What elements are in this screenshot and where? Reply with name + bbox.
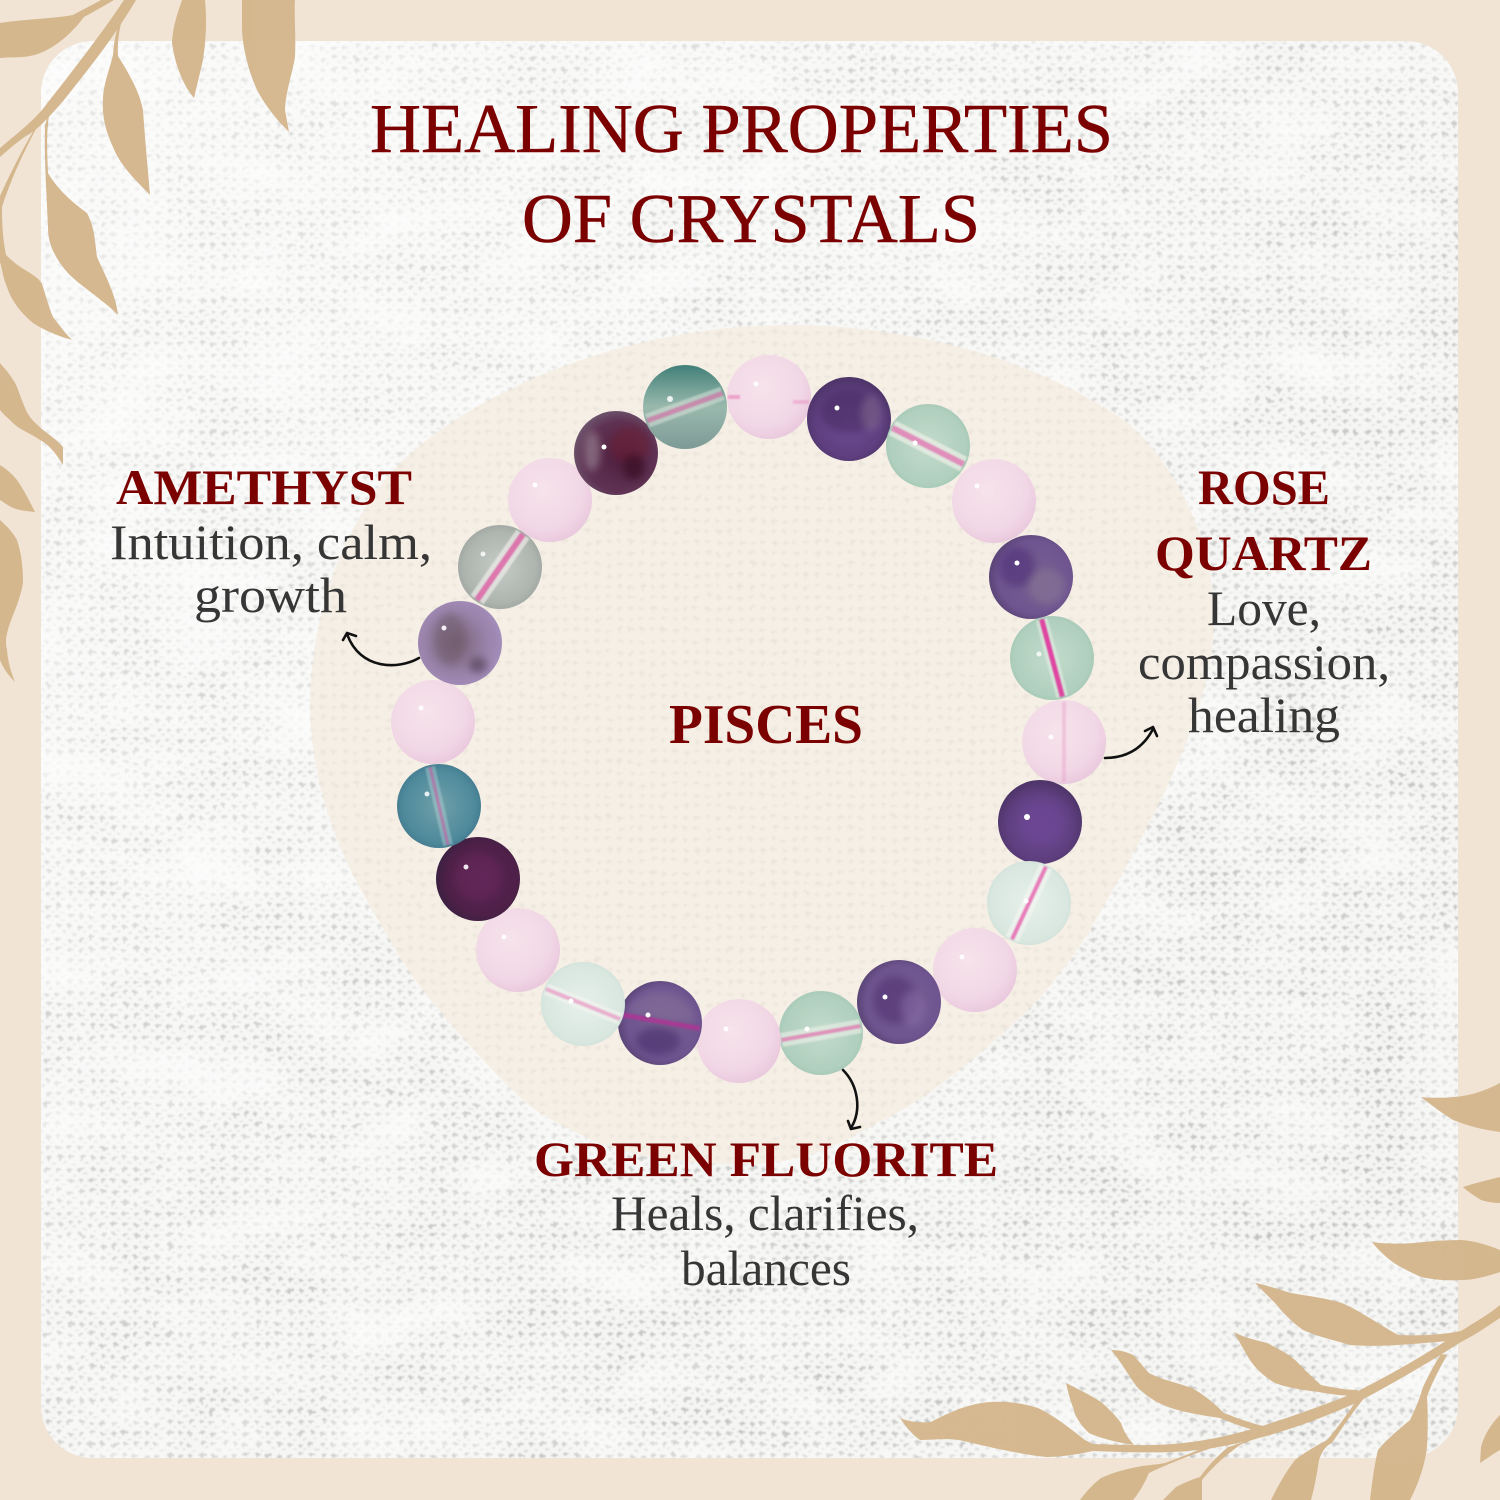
leaves: top-left branch xyxy=(0,0,295,340)
bead: green fluorite, labelled xyxy=(779,991,863,1075)
bead: rose quartz xyxy=(508,458,592,542)
bead: green fluorite xyxy=(1010,616,1094,700)
label: Amethyst: Intuition, calm, xyxy=(110,514,432,570)
cream blob behind bracelet xyxy=(300,315,1225,1175)
label: Rose Quartz: compassion, xyxy=(1138,634,1390,690)
label: Amethyst: growth xyxy=(194,567,347,623)
title xyxy=(370,91,1113,258)
bead: amethyst xyxy=(857,960,941,1044)
label: Green Fluorite: Heals, clarifies, xyxy=(611,1185,919,1241)
label: Rose Quartz: QUARTZ xyxy=(1155,525,1372,581)
bracelet of crystal beads xyxy=(391,355,1106,1083)
bead: rose quartz xyxy=(952,459,1036,543)
bead: grey fluorite xyxy=(458,525,542,609)
bead: pale fluorite xyxy=(987,861,1071,945)
arrow: to amethyst label xyxy=(343,633,419,665)
bead: rose quartz, labelled xyxy=(1022,700,1106,784)
bead: dark amethyst xyxy=(574,411,658,495)
bead: rose quartz xyxy=(476,908,560,992)
label: Green Fluorite: balances xyxy=(681,1240,851,1296)
label: Green Fluorite xyxy=(534,1131,998,1296)
label: Rose Quartz: healing xyxy=(1188,687,1340,743)
bead: rose quartz xyxy=(391,680,475,764)
arrow: to rose quartz label xyxy=(1105,727,1157,758)
arrow: to green fluorite label xyxy=(843,1070,860,1129)
bead: rose quartz xyxy=(727,355,811,439)
bead: green fluorite xyxy=(886,404,970,488)
bead: amethyst, labelled xyxy=(418,601,502,685)
title: HEALING PROPERTIES xyxy=(370,91,1113,168)
bead: rose quartz xyxy=(697,999,781,1083)
heading: Pisces: PISCES xyxy=(669,694,863,756)
leaves: bottom-right branch xyxy=(900,1083,1500,1500)
leaves: left edge xyxy=(0,363,63,682)
bead: amethyst xyxy=(807,377,891,461)
title: OF CRYSTALS xyxy=(522,181,980,258)
bead: pale fluorite xyxy=(541,962,625,1046)
bead: rose quartz xyxy=(933,928,1017,1012)
bead: teal fluorite xyxy=(397,764,481,848)
label: Rose Quartz: ROSE xyxy=(1198,459,1330,515)
label: Amethyst xyxy=(110,459,432,623)
bead: amethyst xyxy=(998,780,1082,864)
label: Green Fluorite: GREEN FLUORITE xyxy=(534,1131,998,1187)
label: Rose Quartz xyxy=(1138,459,1390,743)
bead: amethyst xyxy=(618,981,702,1065)
bead: amethyst xyxy=(989,535,1073,619)
bead: teal fluorite xyxy=(643,365,727,449)
label: Rose Quartz: Love, xyxy=(1207,580,1321,636)
bead: dark amethyst xyxy=(436,837,520,921)
label: Amethyst: AMETHYST xyxy=(116,459,412,515)
